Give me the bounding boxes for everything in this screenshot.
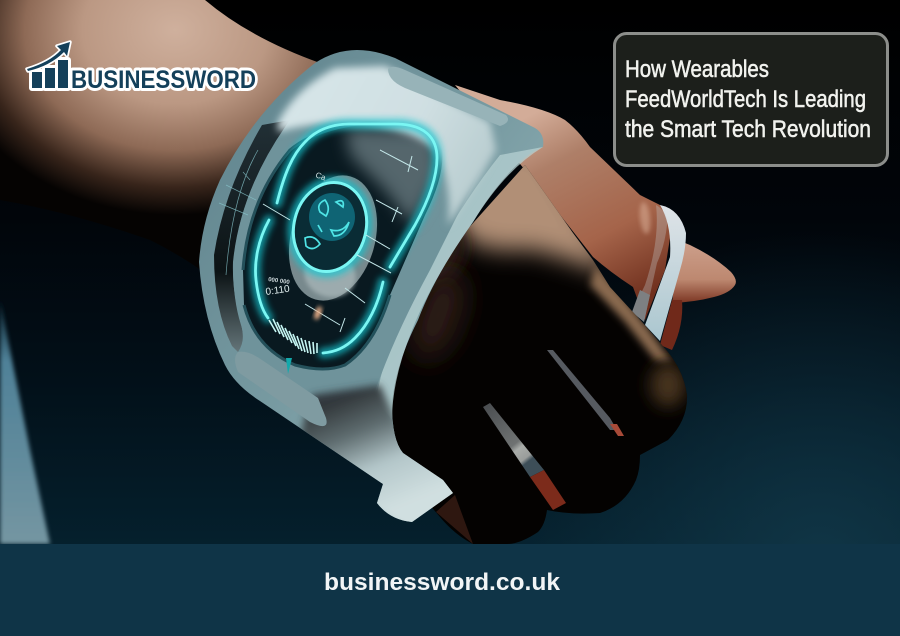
wrist brown	[405, 270, 474, 366]
tan back of hand	[459, 165, 605, 285]
logo bars	[32, 60, 68, 88]
strap clasp	[235, 352, 327, 426]
logo	[27, 42, 256, 94]
gauge pointer	[286, 358, 292, 374]
wrist-side shadow	[434, 226, 476, 284]
title text: the Smart Tech Revolution	[625, 116, 871, 143]
footer url: businessword.co.uk	[324, 569, 561, 596]
oval lower shading	[299, 247, 361, 303]
dark left channel	[214, 120, 290, 354]
lower loop line	[256, 220, 383, 353]
frosted top of band	[278, 66, 496, 226]
tick gauge	[269, 319, 317, 354]
band body	[199, 50, 543, 522]
band lines	[219, 150, 258, 275]
lower finger below ring	[660, 300, 682, 350]
screen	[243, 122, 442, 369]
oval hub	[275, 165, 391, 311]
knuckle brown	[650, 363, 686, 407]
crosshair marks	[263, 150, 418, 332]
footer bar	[0, 544, 900, 636]
upper loop glow	[277, 124, 437, 267]
hub ring	[284, 175, 376, 279]
light stripe at lower left	[0, 300, 50, 544]
screen teal edge	[243, 122, 390, 369]
title box	[614, 34, 888, 166]
forearm	[0, 0, 320, 300]
lit hand edge	[590, 265, 672, 362]
display readouts	[265, 170, 328, 298]
hand and fist	[380, 140, 687, 544]
display readouts: 000 000	[268, 277, 291, 286]
finger tip beyond ring	[672, 241, 736, 303]
thumb	[455, 85, 672, 320]
title panel	[614, 34, 888, 166]
title text	[625, 56, 871, 143]
warm spark	[313, 305, 323, 321]
display readouts: 0:110	[265, 284, 291, 298]
title text: How Wearables	[625, 56, 769, 83]
glow lines	[256, 124, 437, 353]
thumb crease highlight	[638, 202, 652, 234]
hub ring glow	[284, 175, 376, 279]
logo wordmark: BUSINESSWORD	[71, 66, 256, 94]
translucent right rim	[376, 147, 543, 420]
gap colour below finger 1	[530, 470, 566, 510]
red strip under finger 2	[610, 424, 624, 436]
top raised pill	[388, 67, 508, 126]
logo arrow	[27, 42, 70, 71]
lower band wedge	[298, 380, 453, 522]
wristband	[199, 50, 543, 540]
gap between fingers 1	[483, 403, 544, 477]
gap between fingers 2	[547, 350, 617, 430]
lower loop glow	[256, 220, 383, 353]
finger shading	[436, 495, 473, 544]
ring on thumb	[632, 205, 686, 341]
display readouts: Ca	[314, 170, 328, 183]
hub globe	[305, 193, 355, 249]
upper loop line	[277, 124, 437, 267]
screen reflection wash	[345, 128, 442, 225]
hub dark center	[284, 175, 376, 279]
outer grey teal frame	[233, 100, 480, 400]
